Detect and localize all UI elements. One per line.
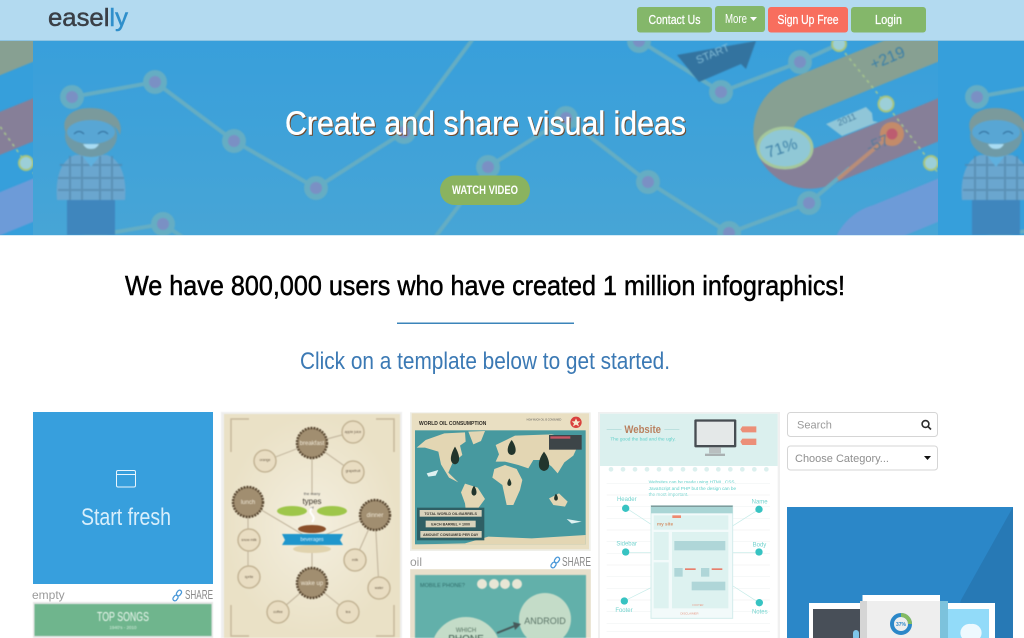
template thumbnail: beverages: grapefruit (346, 469, 360, 473)
template thumbnail: mobile phone: WHICH (456, 628, 476, 634)
search box (788, 412, 938, 436)
hero banner (0, 41, 1024, 236)
watch video button: WATCH VIDEO (452, 183, 518, 197)
header bar (0, 0, 1024, 41)
card caption: oil: SHARE (562, 554, 591, 569)
template thumbnail: beverages: tea (346, 610, 350, 614)
template thumbnail: beverages: breakfast (300, 441, 325, 447)
card caption: oil (410, 554, 591, 569)
template thumbnail: beverages: water (375, 586, 384, 590)
template thumbnail: beverages: milk (352, 558, 358, 562)
start fresh label: Start fresh (81, 504, 171, 531)
button: contact us: Contact Us (648, 12, 701, 27)
icon: magnifier (922, 421, 931, 430)
template thumbnail: beverages: beverages (300, 537, 324, 543)
card caption: empty: empty (32, 588, 65, 602)
dashboards illustration (809, 595, 995, 638)
button: more (715, 6, 765, 32)
template thumbnail: mobile phone: MOBILE PHONE? (420, 583, 465, 589)
template thumbnail: website: Website (624, 424, 661, 436)
template thumbnail: beverages: lunch (241, 500, 255, 506)
start arrow (677, 41, 756, 82)
template thumbnail: world oil consumption: WORLD OIL CONSUMPTION (419, 421, 486, 427)
button: login (851, 7, 926, 32)
template thumbnail: website: Header (617, 497, 637, 503)
right repeated strip (961, 84, 1024, 235)
main heading: We have 800,000 users who have created 1 million infographics! (125, 270, 845, 301)
year tag: 2011 (836, 111, 858, 128)
template thumbnail: beverages: orange (260, 458, 270, 462)
template thumbnail: website: Websites can be made using HTML, CSS, (649, 480, 736, 485)
icon: browser window (116, 470, 136, 487)
template thumbnail: website: Body (753, 543, 766, 549)
template thumbnail: website: FOOTER (692, 603, 703, 607)
template thumbnail: website: Footer (615, 608, 633, 614)
year tag (826, 107, 878, 136)
template thumbnail: website: The good the bad and the ugly. (610, 437, 676, 442)
template thumbnail: beverages (221, 412, 402, 638)
template thumbnail: top songs (33, 602, 213, 638)
panel: start fresh card (33, 412, 213, 584)
template thumbnail: website: JavaScript and PHP but the design can be (649, 486, 736, 491)
template thumbnail: mobile phone (410, 569, 591, 638)
button: contact us (637, 7, 712, 32)
template thumbnail: website: DISCLAIMER (680, 611, 699, 615)
hero title: Create and share visual ideas (285, 104, 686, 142)
template thumbnail: website: my site (657, 522, 673, 527)
watch video button (440, 176, 530, 205)
subheading: Click on a template below to get started. (300, 348, 670, 375)
template thumbnail: top songs: TOP SONGS (97, 609, 149, 624)
button: login: Login (875, 12, 902, 27)
template thumbnail: beverages: dinner (367, 513, 383, 519)
template thumbnail: world oil consumption (410, 412, 591, 551)
template thumbnail: beverages: types (302, 497, 322, 506)
template thumbnail: beverages: the many (304, 491, 320, 496)
logo: easelly (48, 4, 129, 32)
template thumbnail: top songs: 1940's - 2010 (109, 625, 137, 630)
category dropdown (788, 446, 938, 470)
category dropdown: Choose Category... (795, 453, 889, 465)
template thumbnail: website: Sidebar (616, 541, 637, 547)
template thumbnail: beverages: snow milk (241, 538, 257, 542)
template thumbnail: world oil consumption: AMOUNT CONSUMED PER DAY (423, 533, 479, 537)
template thumbnail: beverages: coffee (273, 610, 283, 614)
template thumbnail: world oil consumption: HOW MUCH OIL IS CONSUMED (527, 420, 562, 422)
search box: Search (797, 420, 832, 432)
template thumbnail: world oil consumption: EACH BARREL = 1000 (431, 523, 470, 527)
card caption: empty: SHARE (185, 587, 213, 602)
start arrow: START (694, 42, 732, 67)
navigation buttons (637, 6, 926, 32)
template thumbnail: world oil consumption: TOTAL WORLD OIL:BARRELS (424, 512, 478, 516)
button: sign up free: Sign Up Free (778, 12, 838, 27)
template thumbnail: beverages: apple juice (345, 430, 361, 434)
template thumbnail: website: the most important. (649, 492, 689, 497)
template thumbnail: beverages: sprite (245, 575, 253, 579)
main banner graphic: -57 (864, 132, 892, 157)
template thumbnail: beverages: wake up (300, 581, 324, 587)
card caption: empty (32, 587, 213, 602)
template thumbnail: website: Name (752, 499, 768, 505)
percentage circle: 71% (764, 136, 800, 162)
template thumbnail: mobile phone: ANDROID (524, 616, 566, 626)
template thumbnail: beverages: of (310, 505, 315, 510)
button: more: More (725, 11, 747, 26)
main banner graphic (33, 41, 938, 235)
main banner graphic: +219 (868, 44, 908, 74)
template thumbnail: website: Notes (752, 610, 768, 616)
card caption: oil: oil (410, 555, 422, 569)
left repeated strip (0, 41, 33, 235)
percentage circle (758, 128, 812, 168)
button: sign up free (768, 7, 848, 32)
promotional panel (787, 507, 1013, 638)
template thumbnail: website (598, 412, 780, 638)
dashboards illustration: 37% (896, 622, 907, 628)
